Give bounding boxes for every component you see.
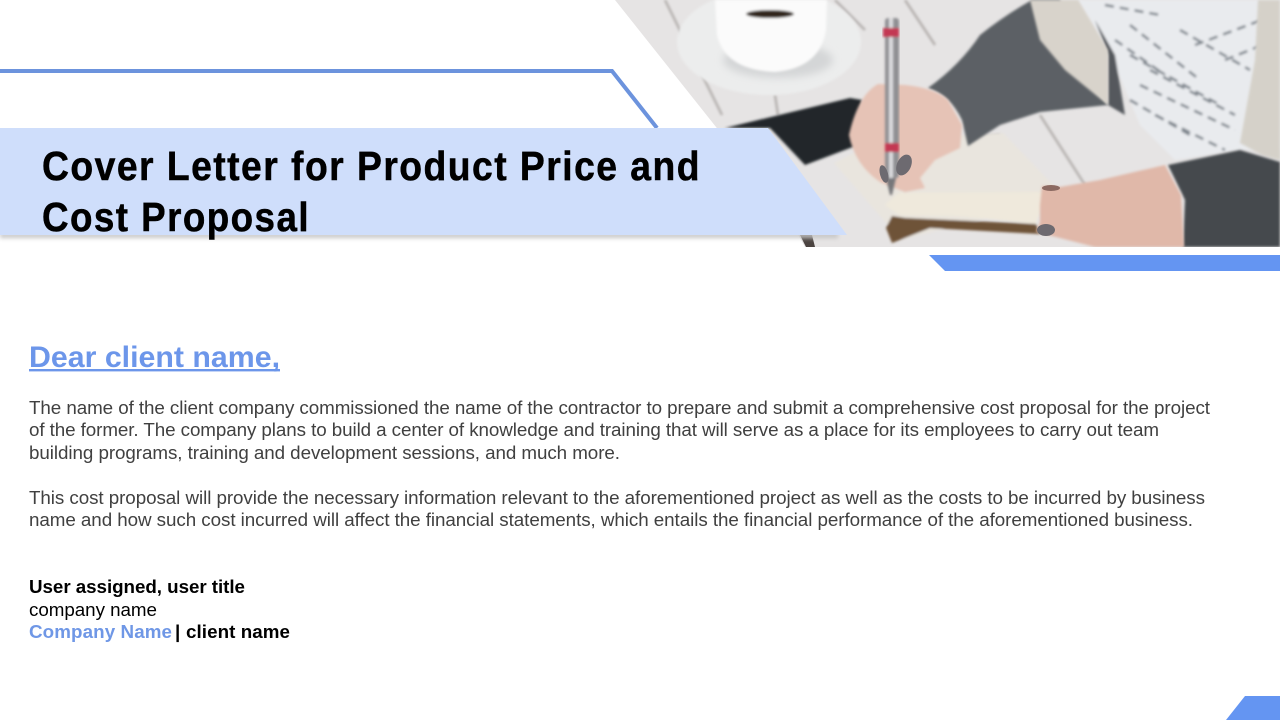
table top <box>600 0 1280 250</box>
letter paragraph 2 <box>29 487 1205 530</box>
company and client line: Company Name <box>29 621 172 642</box>
title banner shadow <box>0 233 838 238</box>
title line 1: Cover Letter for Product Price and <box>42 143 701 189</box>
cardigan edges <box>1030 0 1280 160</box>
accent bar under photo <box>929 255 1280 271</box>
corner accent shape <box>1226 696 1280 720</box>
company and client line: client name <box>186 621 290 642</box>
coffee cup <box>715 0 827 72</box>
photo: hands writing in a notebook at a table <box>600 0 1280 250</box>
letter paragraph 1 <box>29 397 1211 463</box>
salutation: Dear client name, <box>29 341 280 374</box>
right sleeve <box>1168 150 1280 247</box>
phone <box>725 98 862 165</box>
letter paragraph 1: The name of the client company commissioned the name of the contractor to prepare and submit a comprehensive cost proposal for the project <box>29 397 1211 418</box>
title <box>42 143 701 240</box>
signer company: company name <box>29 599 157 620</box>
notebook <box>884 134 1040 244</box>
signer name and title: User assigned, user title <box>29 576 245 597</box>
table shadow at base <box>800 235 815 247</box>
blue outline line <box>0 71 657 128</box>
company and client line: | <box>175 621 180 642</box>
title banner <box>0 128 847 235</box>
company and client line <box>29 621 290 642</box>
right hand <box>1036 165 1184 247</box>
title line 2: Cost Proposal <box>42 194 310 240</box>
letter paragraph 1: building programs, training and development sessions, and much more. <box>29 442 620 463</box>
signature block <box>29 576 290 642</box>
left sleeve <box>928 0 1108 146</box>
letter paragraph 1: of the former. The company plans to build a center of knowledge and training that will serve as a place for its employees to carry out team <box>29 419 1159 440</box>
pen <box>883 18 899 195</box>
letter paragraph 2: name and how such cost incurred will affect the financial statements, which entails the financial performance of the aforementioned business. <box>29 509 1193 530</box>
saucer <box>677 0 861 95</box>
white patterned sweater <box>1082 2 1258 158</box>
letter paragraph 2: This cost proposal will provide the necessary information relevant to the aforementioned project as well as the costs to be incurred by business <box>29 487 1205 508</box>
painted nails <box>878 152 1060 236</box>
left hand <box>849 84 962 192</box>
